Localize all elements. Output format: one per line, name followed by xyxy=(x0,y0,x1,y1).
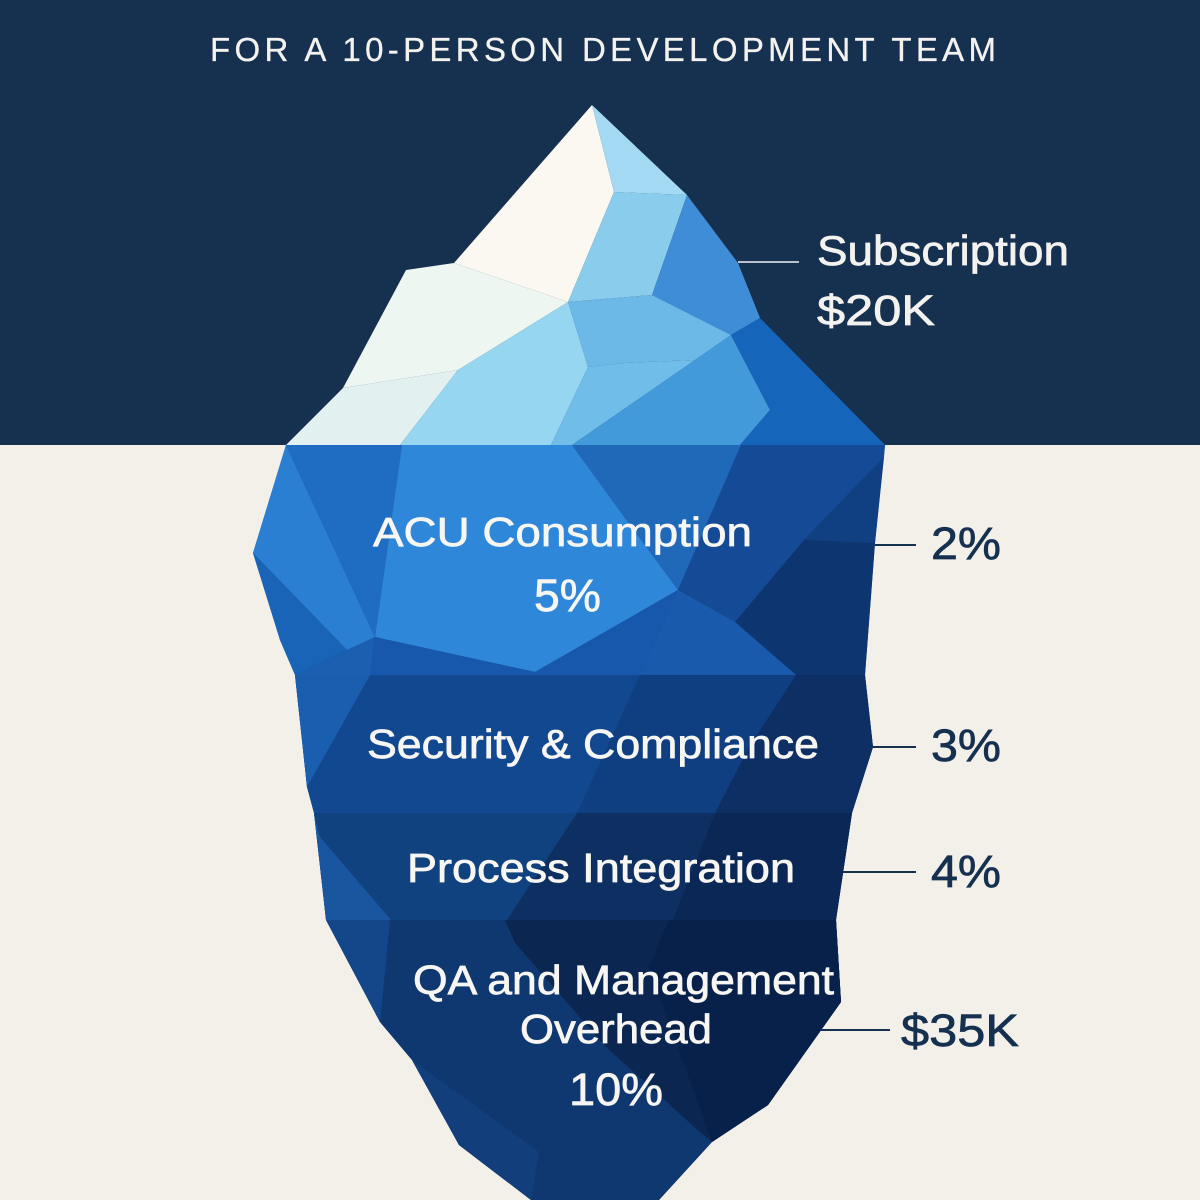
label: Subscription xyxy=(738,227,1069,335)
label: Subscription: $20K xyxy=(817,287,935,335)
label: QA and Management Overhead: 10% xyxy=(569,1064,663,1115)
label: ACU Consumption: ACU Consumption xyxy=(373,509,752,555)
iceberg tip above water xyxy=(286,105,885,445)
label: QA and Management Overhead: QA and Management xyxy=(413,957,835,1003)
callout: 2% xyxy=(875,518,1001,569)
label: QA and Management Overhead xyxy=(413,957,835,1115)
callout: 3%: 3% xyxy=(931,720,1001,771)
label: Subscription: Subscription xyxy=(817,227,1069,274)
label: Security & Compliance: Security & Compliance xyxy=(367,721,819,767)
label: ACU Consumption xyxy=(373,509,752,621)
panel: above water background xyxy=(0,0,1200,445)
label: Process Integration: Process Integration xyxy=(407,845,795,891)
callout: $35K: $35K xyxy=(901,1005,1019,1056)
label: ACU Consumption: 5% xyxy=(534,570,601,621)
title: FOR A 10-PERSON DEVELOPMENT TEAM xyxy=(210,31,996,68)
label: QA and Management Overhead: Overhead xyxy=(520,1006,712,1052)
iceberg body below water xyxy=(253,445,885,1200)
callout: 2%: 2% xyxy=(931,518,1001,569)
panel: below water background xyxy=(0,445,1200,1200)
callout: 3% xyxy=(872,720,1001,771)
callout: 4%: 4% xyxy=(931,846,1001,897)
